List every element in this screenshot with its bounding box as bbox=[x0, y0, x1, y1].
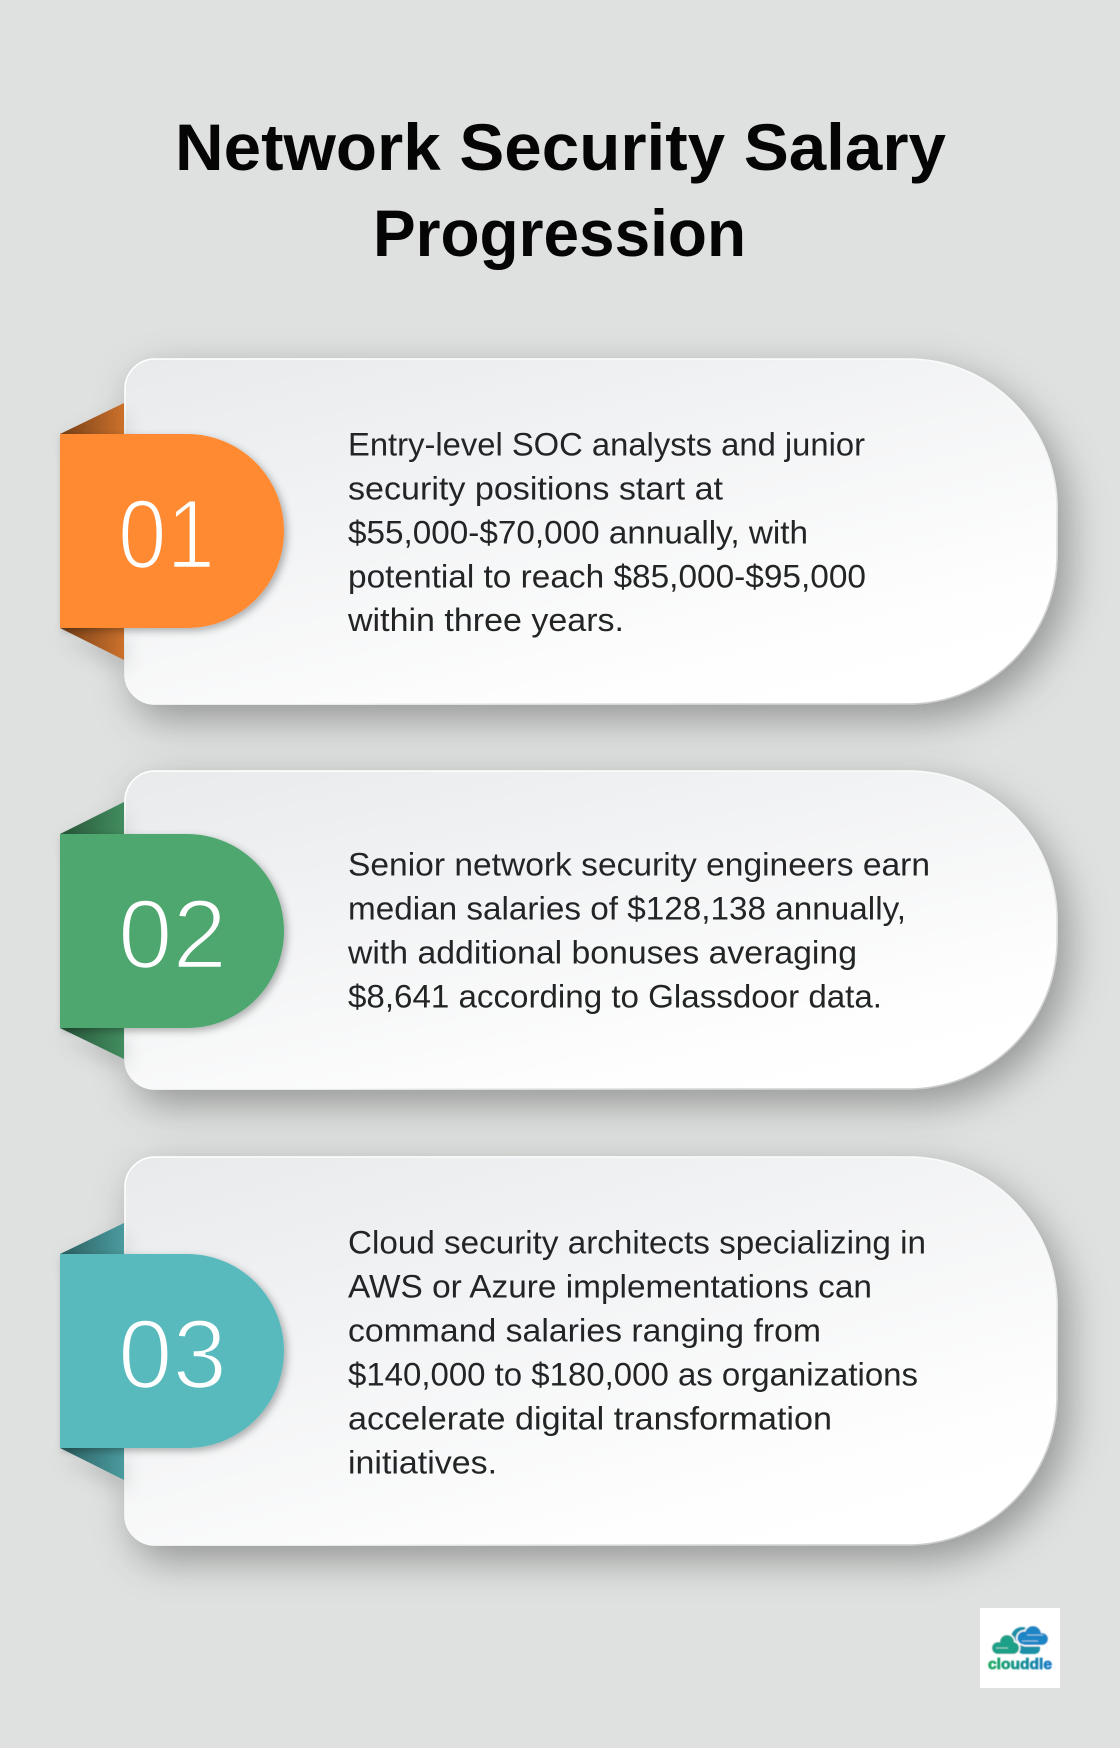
panel: step 02 bbox=[60, 771, 1057, 1089]
text: step 01 description: Entry-level SOC analysts and junior bbox=[348, 426, 865, 462]
title bbox=[175, 110, 946, 270]
text: step 02 description: median salaries of $128,138 annually, bbox=[348, 890, 906, 926]
text: step 01 description bbox=[347, 426, 866, 638]
text: step 03 description: Cloud security architects specializing in bbox=[348, 1224, 926, 1260]
number tab: step 01 bbox=[60, 434, 284, 628]
ribbon folds: step 03 bbox=[60, 1223, 124, 1480]
number: 03: 03 bbox=[118, 1299, 227, 1409]
text: step 01 description: security positions start at bbox=[348, 470, 723, 506]
ribbon folds: step 01 bbox=[60, 403, 124, 660]
text: step 01 description: within three years. bbox=[347, 602, 624, 638]
text: step 02 description: $8,641 according to Glassdoor data. bbox=[348, 978, 882, 1014]
panel: step 01 bbox=[60, 359, 1057, 704]
text: step 03 description bbox=[348, 1224, 926, 1480]
card: step 02 background bbox=[125, 771, 1057, 1089]
title: Network Security Salary bbox=[175, 110, 946, 184]
number: 02: 02 bbox=[118, 879, 227, 989]
number tab: step 03 bbox=[60, 1254, 284, 1448]
text: step 03 description: $140,000 to $180,000 as organizations bbox=[348, 1356, 918, 1392]
number tab: step 02 bbox=[60, 834, 284, 1028]
card: step 01 background bbox=[125, 359, 1057, 704]
text: step 03 description: command salaries ranging from bbox=[348, 1312, 821, 1348]
logo wordmark: clouddle bbox=[988, 1656, 1052, 1673]
text: step 02 description: Senior network security engineers earn bbox=[348, 846, 930, 882]
card: step 03 background bbox=[125, 1157, 1057, 1545]
text: step 03 description: initiatives. bbox=[348, 1444, 497, 1480]
logo: clouddle bbox=[980, 1608, 1060, 1688]
panel: step 03 bbox=[60, 1157, 1057, 1545]
text: step 01 description: potential to reach $85,000-$95,000 bbox=[348, 558, 866, 594]
ribbon folds: step 02 bbox=[60, 802, 124, 1059]
icon: clouds bbox=[990, 1624, 1050, 1656]
title: Progression bbox=[373, 196, 746, 270]
number: 01: 01 bbox=[118, 479, 215, 589]
text: step 02 description bbox=[347, 846, 930, 1014]
text: step 02 description: with additional bonuses averaging bbox=[347, 934, 857, 970]
text: step 01 description: $55,000-$70,000 annually, with bbox=[348, 514, 808, 550]
text: step 03 description: AWS or Azure implementations can bbox=[348, 1268, 872, 1304]
text: step 03 description: accelerate digital transformation bbox=[348, 1400, 832, 1436]
